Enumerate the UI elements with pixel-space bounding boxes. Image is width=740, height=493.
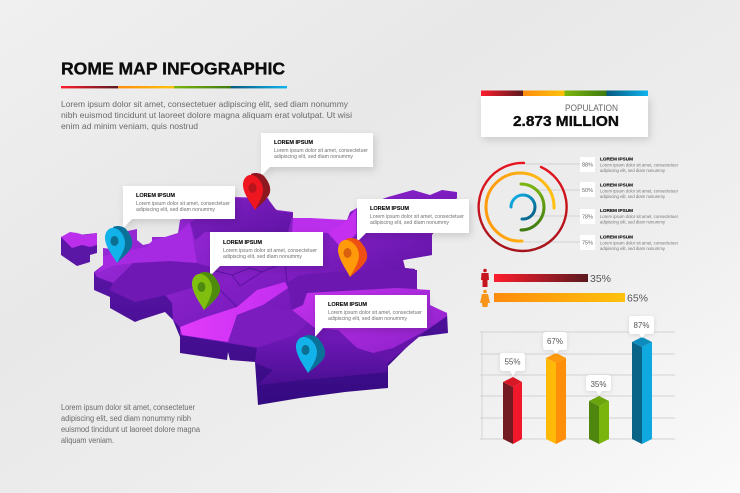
title: ROME MAP INFOGRAPHIC	[61, 58, 285, 78]
radial chart	[479, 163, 580, 251]
legend item 88%: 88%	[582, 162, 593, 168]
legend item 78%: LOREM IPSUM	[600, 208, 633, 214]
population panel	[481, 90, 648, 137]
male percentage: 35%	[590, 273, 611, 285]
bar 55%: 55%	[504, 358, 521, 366]
icon: blue map pin south	[296, 335, 325, 373]
intro text: nibh euismod tincidunt ut laoreet dolore magna aliquam erat volutpat. Ut wisi	[61, 110, 352, 120]
legend item 50%: Lorem ipsum dolor sit amet, consectetuer	[600, 188, 678, 194]
male percentage bar	[494, 274, 588, 282]
callout: west: adipiscing elit, sed diam nonummy	[136, 207, 215, 213]
map bright river district	[180, 282, 288, 342]
map central district lines	[212, 262, 322, 307]
icon: green map pin	[192, 272, 220, 310]
bar 67%	[543, 332, 567, 444]
bar 87%: 87%	[633, 321, 650, 330]
map upper-middle dark district	[190, 198, 293, 240]
map upper-left bright district	[97, 222, 197, 273]
callout: center: Lorem ipsum dolor sit amet, consectetuer	[223, 248, 317, 254]
bar 35%	[586, 375, 611, 444]
icon: male figure	[481, 269, 489, 287]
legend item 75%	[580, 234, 678, 251]
callout: north: adipiscing elit, sed diam nonummy	[274, 154, 353, 160]
map middle district	[287, 270, 417, 310]
icon: female figure	[480, 290, 490, 307]
icon: blue map pin west	[105, 226, 132, 263]
legend item 88%	[580, 156, 678, 173]
map top surface	[94, 190, 457, 385]
legend item 78%: Lorem ipsum dolor sit amet, consectetuer	[600, 214, 678, 219]
legend item 88%: adipiscing elit, sed diam nonummy	[600, 168, 666, 173]
icon: red map pin	[243, 173, 270, 210]
legend item 78%: 78%	[582, 214, 593, 220]
icon: orange map pin	[338, 238, 367, 277]
bottom text: euismod tincidunt ut laoreet dolore magna	[61, 425, 201, 434]
map north-east bright sliver	[328, 209, 357, 252]
legend item 75%: LOREM IPSUM	[600, 234, 633, 240]
legend item 78%: adipiscing elit, sed diam nonummy	[600, 220, 666, 224]
bottom text	[61, 403, 201, 445]
legend item 50%: LOREM IPSUM	[600, 182, 633, 188]
legend item 75%: 75%	[582, 240, 593, 246]
callout: east: adipiscing elit, sed diam nonummy	[370, 220, 449, 226]
bar 55%	[500, 353, 525, 444]
population label: POPULATION	[565, 103, 618, 113]
3D bar chart	[480, 316, 675, 444]
intro text: enim ad minim veniam, quis nostrud	[61, 121, 198, 131]
legend item 50%: adipiscing elit, sed diam nonummy	[600, 194, 666, 199]
bottom text: adipiscing elit, sed diam nonummy nibh	[61, 414, 191, 423]
intro text	[61, 99, 352, 131]
legend item 88%: Lorem ipsum dolor sit amet, consectetuer	[600, 162, 678, 168]
callout: north: LOREM IPSUM	[274, 140, 314, 146]
isometric map of Rome	[61, 190, 457, 405]
map north bright district	[292, 218, 347, 233]
callout: south: LOREM IPSUM	[328, 302, 368, 308]
callout: west: LOREM IPSUM	[136, 193, 176, 199]
callout: west: Lorem ipsum dolor sit amet, consectetuer	[136, 201, 230, 207]
bottom text: aliquam veniam.	[61, 436, 114, 445]
bar 67%: 67%	[547, 337, 563, 346]
map south bright district	[292, 288, 447, 353]
map island	[61, 232, 97, 266]
legend item 88%: LOREM IPSUM	[600, 156, 633, 162]
map east dark district	[320, 233, 432, 288]
legend item 78%	[580, 208, 678, 224]
map bottom district	[255, 330, 388, 385]
bar 87%	[629, 316, 654, 444]
map center south dark district	[228, 305, 307, 348]
callout: east	[357, 199, 469, 242]
callout: center	[210, 232, 323, 276]
callout: south	[315, 295, 427, 337]
callout: north	[261, 133, 373, 176]
callout: center: adipiscing elit, sed diam nonummy	[223, 254, 302, 260]
legend item 75%: adipiscing elit, sed diam nonummy	[600, 246, 666, 251]
legend item 50%: 50%	[582, 188, 593, 194]
legend item 50%	[580, 182, 678, 199]
callout: east: Lorem ipsum dolor sit amet, consectetuer	[370, 214, 464, 220]
intro text: Lorem ipsum dolor sit amet, consectetuer adipiscing elit, sed diam nonummy	[61, 99, 349, 109]
bottom text: Lorem ipsum dolor sit amet, consectetuer	[61, 403, 195, 412]
callout: west	[123, 186, 235, 228]
map lower-left dark district	[110, 261, 210, 302]
callout: north: Lorem ipsum dolor sit amet, consectetuer	[274, 148, 368, 154]
bar 35%: 35%	[590, 380, 607, 389]
female percentage: 65%	[627, 292, 648, 304]
legend item 75%: Lorem ipsum dolor sit amet, consectetuer	[600, 240, 678, 246]
female percentage bar	[494, 293, 625, 302]
callout: south: Lorem ipsum dolor sit amet, consectetuer	[328, 310, 422, 316]
callout: center: LOREM IPSUM	[223, 240, 263, 246]
callout: south: adipiscing elit, sed diam nonummy	[328, 316, 407, 322]
map extruded sides	[94, 272, 448, 405]
population value: 2.873 MILLION	[513, 113, 619, 130]
callout: east: LOREM IPSUM	[370, 206, 410, 212]
radial legend	[580, 156, 678, 251]
title rainbow underline	[61, 86, 287, 88]
population colour strip	[481, 90, 648, 96]
